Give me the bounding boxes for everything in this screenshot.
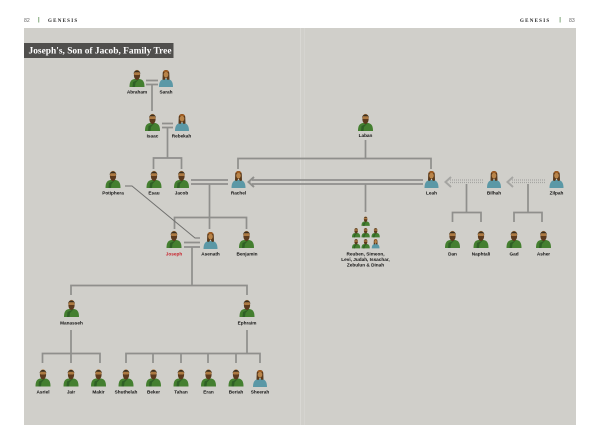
person: Asriel xyxy=(36,369,50,394)
person: Rebekah: Rebekah xyxy=(172,134,191,138)
person: Manasseh: Manasseh xyxy=(60,320,83,326)
person: Asher xyxy=(536,231,551,256)
person: Asenath: Asenath xyxy=(201,252,220,256)
person: Sheerah xyxy=(251,370,269,394)
person: Asenath xyxy=(201,232,220,256)
person: Sheerah: Sheerah xyxy=(251,390,269,394)
person: Gad xyxy=(506,231,522,256)
title: Joseph's, Son of Jacob, Family Tree xyxy=(28,46,172,56)
person: Sarah: Sarah xyxy=(159,90,173,94)
person: Leah: Leah xyxy=(426,190,437,196)
person: Eran: Eran xyxy=(203,390,214,394)
person: Beriah: Beriah xyxy=(229,390,243,394)
person: Abraham xyxy=(127,70,147,94)
person: Rebekah xyxy=(172,114,191,138)
person: Eran xyxy=(201,369,216,394)
person: Zilpah: Zilpah xyxy=(550,190,564,196)
person: Manasseh xyxy=(60,300,83,326)
person: Rachel xyxy=(231,171,246,196)
group: children of Leah: Levi, Judah, Issachar, xyxy=(341,257,390,262)
person: Jacob: Jacob xyxy=(175,190,188,196)
person: Joseph: Joseph xyxy=(166,252,182,256)
person: Rachel: Rachel xyxy=(231,190,246,196)
page header left: GENESIS xyxy=(48,19,78,24)
person: Leah xyxy=(424,171,438,196)
group: children of Leah: Zebulun & Dinah xyxy=(347,262,384,268)
person: Beriah xyxy=(228,369,244,394)
arrow: Bilhah to Leah xyxy=(446,177,483,187)
person: Isaac xyxy=(145,114,160,138)
person: Naphtali xyxy=(472,231,490,256)
person: Potiphera: Potiphera xyxy=(102,190,124,196)
person: Gad: Gad xyxy=(509,252,519,256)
person: Naphtali: Naphtali xyxy=(472,252,490,256)
person: Dan xyxy=(445,231,460,256)
person: Joseph xyxy=(166,231,182,256)
page header right xyxy=(520,17,575,24)
person: Tahan xyxy=(174,369,188,394)
group: children of Leah: Reuben, Simeon, xyxy=(346,252,385,256)
person: Bilhah xyxy=(487,171,501,196)
person: Laban: Laban xyxy=(359,133,373,138)
page header left xyxy=(24,17,78,24)
page header left: 82 xyxy=(24,18,30,24)
person: Ephraim xyxy=(238,300,256,326)
page header right: 83 xyxy=(569,18,575,24)
arrow: Leah to Rachel xyxy=(248,177,423,187)
person: Bilhah: Bilhah xyxy=(487,190,501,196)
person: Esau: Esau xyxy=(148,190,160,196)
connector lines xyxy=(42,80,542,363)
person: Esau xyxy=(146,171,162,196)
person: Jair xyxy=(64,369,78,394)
person: Abraham: Abraham xyxy=(127,90,147,94)
person: Asher: Asher xyxy=(537,252,550,256)
person: Asriel: Asriel xyxy=(36,390,50,394)
person: Jacob xyxy=(174,171,189,196)
person: Shuthelah xyxy=(115,369,137,394)
person: Makir xyxy=(91,369,106,394)
person: Beker: Beker xyxy=(147,390,160,394)
person: Laban xyxy=(358,114,373,138)
person: Benjamin: Benjamin xyxy=(236,252,258,256)
person: Jair: Jair xyxy=(67,390,75,394)
person: Sarah xyxy=(159,70,173,94)
person: Isaac: Isaac xyxy=(147,134,159,138)
person: Dan: Dan xyxy=(448,252,457,256)
person: Potiphera xyxy=(102,171,124,196)
line: Potiphera to Asenath xyxy=(125,186,200,238)
title xyxy=(24,43,174,58)
arrow: Zilpah to Bilhah xyxy=(508,177,546,187)
person: Zilpah xyxy=(550,171,564,196)
page header right: GENESIS xyxy=(520,19,550,24)
person: Shuthelah: Shuthelah xyxy=(115,390,137,394)
person: Benjamin xyxy=(236,231,258,256)
person: Makir: Makir xyxy=(92,390,105,394)
person: Ephraim: Ephraim xyxy=(238,320,256,326)
group: children of Leah xyxy=(341,216,390,268)
person: Beker xyxy=(146,369,161,394)
person: Tahan: Tahan xyxy=(174,390,188,394)
